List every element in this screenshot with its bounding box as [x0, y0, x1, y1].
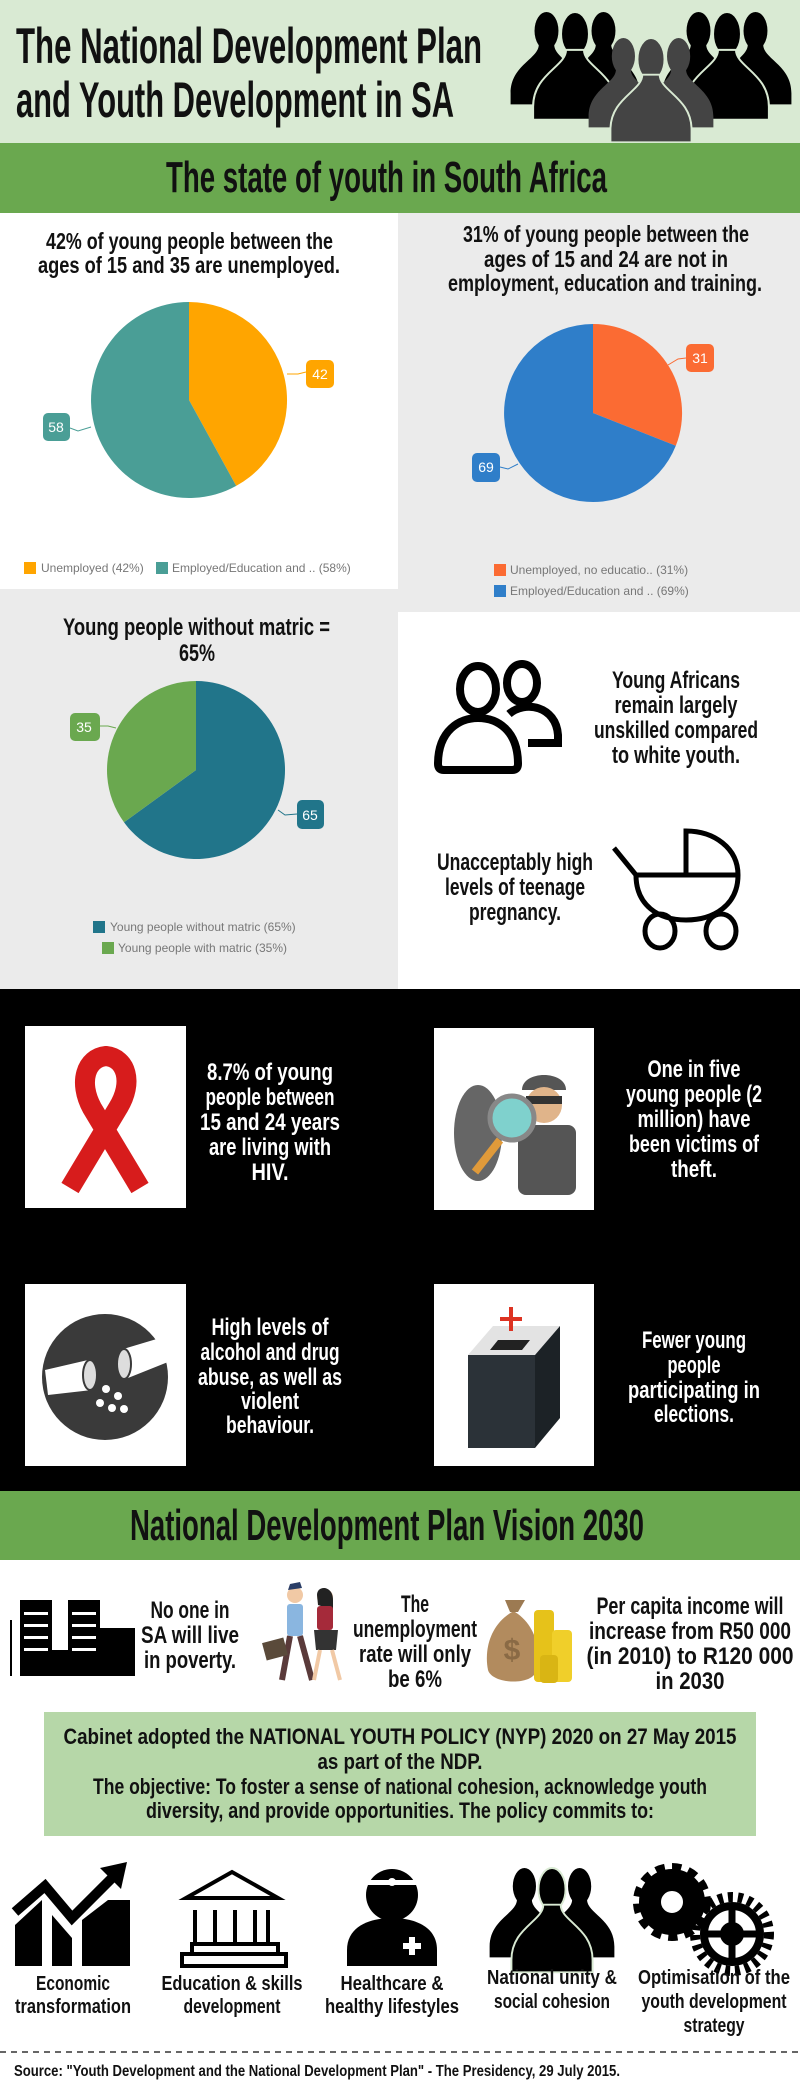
chart title	[38, 228, 340, 278]
text: unemployment 6%: be 6%	[388, 1666, 442, 1693]
legend: Young people with matric (35%)	[118, 941, 287, 955]
panel: NEET pie	[398, 213, 800, 612]
text: HIV	[200, 1059, 340, 1186]
chart title	[63, 614, 330, 667]
source note: Source: "Youth Development and the National Development Plan" - The Presidency, 29 July 2015.	[14, 2063, 620, 2080]
text: HIV: HIV.	[252, 1159, 288, 1186]
icon: healthcare doctor	[347, 1869, 437, 1966]
text: alcohol and drugs: High levels of	[212, 1314, 329, 1341]
callout: national youth policy box	[44, 1712, 756, 1836]
pie chart 31/69: 31	[692, 350, 708, 366]
text: elections: elections.	[654, 1401, 734, 1428]
text: no poverty	[141, 1597, 239, 1674]
header background	[0, 0, 800, 143]
text: elections: participating in	[628, 1377, 760, 1404]
text: young Africans unskilled: remain largely	[614, 692, 738, 719]
icon: gears	[638, 1868, 769, 1971]
legend	[494, 563, 689, 598]
icon: ballot box	[434, 1284, 594, 1466]
text: HIV: 15 and 24 years	[200, 1109, 340, 1136]
chart title: ages of 15 and 35 are unemployed.	[38, 252, 340, 278]
pie chart 42/58: 58	[48, 419, 64, 435]
text: policy commitments labels: National unity &	[487, 1967, 617, 1989]
pie chart 65/35: 35	[76, 719, 92, 735]
text: policy commitments labels: Education & skills	[162, 1973, 302, 1995]
chart title: 42% of young people between the	[46, 228, 333, 254]
title: and Youth Development in SA	[16, 72, 454, 128]
chart title: ages of 15 and 24 are not in	[484, 246, 728, 272]
chart title: 65%	[179, 640, 215, 667]
section band: NDP vision 2030	[0, 1491, 800, 1560]
icon: pram	[614, 831, 738, 948]
pie chart 42/58	[43, 302, 334, 498]
pie chart 31/69	[472, 324, 714, 502]
text: HIV: 8.7% of young	[207, 1059, 333, 1086]
text: policy commitments labels: Economic	[36, 1973, 110, 1995]
text: HIV: people between	[206, 1084, 334, 1111]
chart title	[448, 221, 762, 296]
text: policy commitments labels: Healthcare &	[340, 1973, 444, 1995]
text: theft	[626, 1056, 762, 1183]
text: unemployment 6%	[353, 1591, 477, 1693]
text: theft: theft.	[671, 1156, 717, 1183]
icon: red ribbon	[25, 1026, 186, 1208]
legend: Employed/Education and .. (58%)	[172, 561, 351, 575]
title	[16, 18, 482, 128]
text: policy commitments labels: strategy	[684, 2015, 745, 2037]
text: HIV: are living with	[209, 1134, 331, 1161]
text: per capita income	[586, 1593, 794, 1695]
legend: Employed/Education and .. (69%)	[510, 584, 689, 598]
pie chart 65/35: 65	[302, 807, 318, 823]
text: young Africans unskilled	[594, 667, 758, 769]
chart title: Young people without matric =	[63, 614, 330, 641]
text: no poverty: SA will live	[141, 1622, 239, 1649]
text: teenage pregnancy: levels of teenage	[445, 874, 585, 901]
text: theft: been victims of	[629, 1131, 760, 1158]
legend	[93, 920, 296, 955]
legend: Unemployed, no educatio.. (31%)	[510, 563, 688, 577]
panel: matric pie	[0, 589, 398, 989]
panel: black risks section	[0, 989, 800, 1491]
icon: thief with magnifier	[434, 1028, 594, 1210]
legend: Unemployed (42%)	[41, 561, 144, 575]
panel: skills and pregnancy	[398, 612, 800, 989]
text: alcohol and drugs: behaviour.	[226, 1412, 314, 1439]
pie chart 65/35	[70, 681, 324, 859]
text: alcohol and drugs: abuse, as well as	[198, 1364, 342, 1391]
pie chart 42/58: 42	[312, 366, 328, 382]
text: unemployment 6%: unemployment	[353, 1616, 477, 1643]
text: theft: million) have	[638, 1106, 750, 1133]
text: policy commitments labels: development	[184, 1996, 281, 2018]
icon: national unity people	[490, 1868, 614, 1972]
icon: city	[11, 1600, 135, 1676]
title: The National Development Plan	[16, 18, 482, 74]
text: policy commitments labels	[15, 1967, 790, 2037]
callout: national youth policy box: as part of the NDP.	[318, 1749, 482, 1774]
text: elections: people	[668, 1352, 720, 1379]
text: teenage pregnancy: pregnancy.	[469, 899, 561, 926]
callout: national youth policy box: diversity, and provide opportunities. The policy commits to:	[146, 1798, 654, 1823]
text: policy commitments labels: transformation	[15, 1996, 131, 2018]
text: elections	[628, 1327, 760, 1428]
text: young Africans unskilled: Young Africans	[612, 667, 740, 694]
legend	[24, 561, 351, 575]
text: unemployment 6%: The	[401, 1591, 429, 1618]
icon: walking couple	[262, 1582, 340, 1680]
text: alcohol and drugs	[198, 1314, 342, 1439]
text: no poverty: No one in	[150, 1597, 230, 1624]
text: young Africans unskilled: to white youth.	[612, 742, 740, 769]
text: alcohol and drugs: alcohol and drug	[200, 1339, 340, 1366]
icon: drugs	[25, 1284, 186, 1466]
pie chart 31/69: 69	[478, 459, 494, 475]
icon: education building	[182, 1872, 286, 1966]
icon: money bag and coins: $	[504, 1634, 521, 1667]
text: policy commitments labels: healthy lifestyles	[325, 1996, 459, 2018]
legend: Young people without matric (65%)	[110, 920, 296, 934]
text: per capita income: in 2030	[656, 1668, 724, 1695]
section band: state of youth	[0, 143, 800, 213]
text: unemployment 6%: rate will only	[359, 1641, 471, 1668]
text: alcohol and drugs: violent	[241, 1388, 299, 1415]
text: policy commitments labels: social cohesion	[494, 1991, 610, 2013]
icon: money bag and coins	[487, 1600, 572, 1683]
text: teenage pregnancy	[437, 849, 593, 926]
text: no poverty: in poverty.	[144, 1647, 236, 1674]
icon: crowd of people	[511, 12, 791, 142]
icon: economic growth chart	[15, 1862, 130, 1966]
icon: two people outline	[438, 664, 558, 770]
text: teenage pregnancy: Unacceptably high	[437, 849, 593, 876]
text: elections: Fewer young	[642, 1327, 746, 1354]
text: theft: One in five	[648, 1056, 740, 1083]
panel: unemployment pie	[0, 213, 398, 589]
